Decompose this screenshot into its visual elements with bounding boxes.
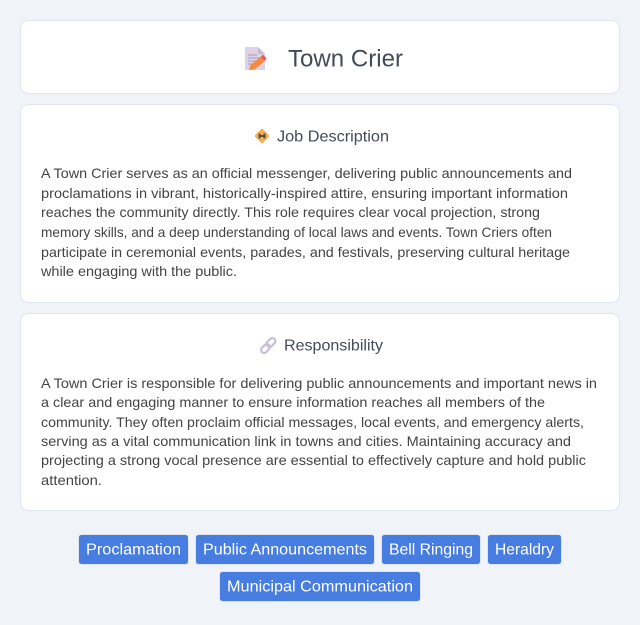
tag: bell ringing: Bell Ringing <box>389 542 473 558</box>
job description text: A Town Crier serves as an official messenger, delivering public announcements and <box>41 165 572 181</box>
heading: responsibility: Responsibility <box>284 338 383 354</box>
icon: document with pencil <box>245 47 266 70</box>
tag: public announcements: Public Announcements <box>203 542 367 558</box>
heading: job description: Job Description <box>277 128 389 146</box>
responsibility text: projecting a strong vocal presence are essential to effectively capture and hold public <box>41 452 586 468</box>
tag: municipal communication <box>220 572 420 602</box>
tag list <box>78 534 562 602</box>
responsibility text <box>41 375 597 488</box>
tag: heraldry: Heraldry <box>495 542 554 558</box>
job description text: participate in ceremonial events, parades, and festivals, preserving cultural heritage <box>41 244 570 260</box>
panel: job description <box>20 104 620 302</box>
panel: responsibility <box>20 314 620 510</box>
job description text: while engaging with the public. <box>40 263 237 279</box>
icon: diamond sign <box>254 128 270 144</box>
title text: Town Crier <box>288 46 403 72</box>
tag: heraldry <box>488 534 562 564</box>
tag: proclamation: Proclamation <box>86 542 181 558</box>
responsibility text: a clear and engaging manner to ensure information reaches all members of the <box>41 394 545 410</box>
job description text: reaches the community directly. This role requires clear vocal projection, strong <box>41 204 540 220</box>
tag: bell ringing <box>382 534 480 564</box>
tag: proclamation <box>78 534 188 564</box>
responsibility text: serving as a vital communication link in towns and cities. Maintaining accuracy and <box>41 433 571 449</box>
job description text: proclamations in vibrant, historically-inspired attire, ensuring important information <box>41 185 568 201</box>
job description text <box>40 165 572 279</box>
icon: chain link <box>260 337 277 354</box>
panel: title <box>20 20 620 94</box>
job description text: memory skills, and a deep understanding of local laws and events. Town Criers often <box>41 224 552 240</box>
responsibility text: A Town Crier is responsible for delivering public announcements and important news in <box>41 375 597 391</box>
tag: municipal communication: Municipal Communication <box>227 578 413 596</box>
responsibility text: attention. <box>41 472 102 488</box>
tag: public announcements <box>196 534 374 564</box>
responsibility text: community. They often proclaim official messages, local events, and emergency alerts, <box>41 414 584 430</box>
